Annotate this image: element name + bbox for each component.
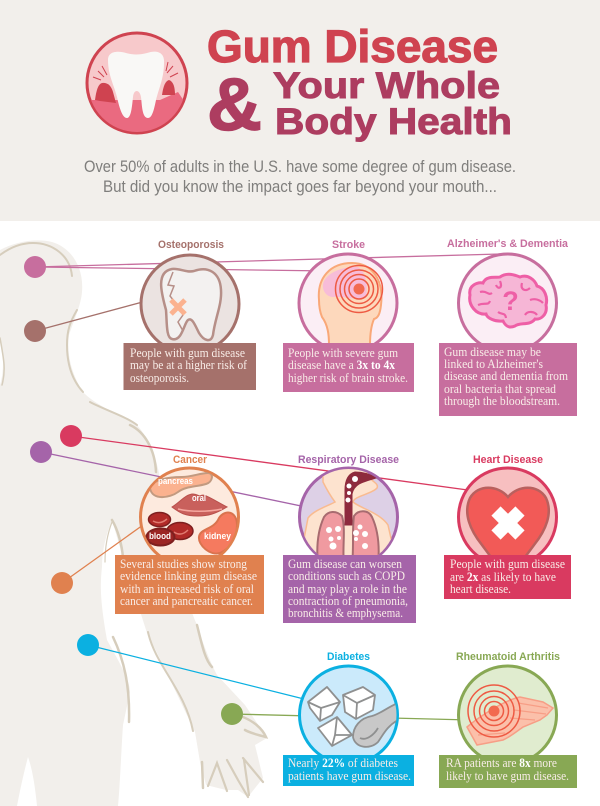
panel: osteoporosis [124, 239, 256, 390]
icon: pancreas, lips, blood, kidney: blood [149, 531, 171, 541]
panel: heart disease: Heart Disease [473, 454, 543, 466]
panel: stroke: Stroke [332, 239, 365, 251]
connector lines [35, 254, 500, 720]
panel: alzheimer's and dementia: linked to Alzheimer's [444, 356, 543, 371]
intro text: Over 50% of adults in the U.S. have some degree of gum disease. [84, 157, 516, 176]
panel: alzheimer's and dementia: Gum disease may be [444, 344, 541, 359]
panel: diabetes [283, 651, 414, 786]
panel: respiratory disease [283, 454, 416, 623]
icon: head with target [299, 254, 397, 352]
panel: respiratory disease: conditions such as COPD [288, 568, 405, 583]
panel: alzheimer's and dementia: through the bloodstream. [444, 393, 560, 408]
icon: pancreas, lips, blood, kidney: pancreas [158, 476, 193, 486]
panel: respiratory disease: contraction of pneumonia, [288, 593, 408, 608]
body marker dots [24, 256, 243, 725]
panel: diabetes: Diabetes [327, 651, 370, 663]
panel: respiratory disease: Gum disease can worsen [288, 556, 402, 571]
panel: respiratory disease: Respiratory Disease [298, 454, 399, 466]
panel: stroke: People with severe gum [288, 345, 398, 360]
title: & [207, 63, 262, 146]
panel: cancer: evidence linking gum disease [120, 568, 257, 583]
icon: pancreas, lips, blood, kidney: kidney [204, 531, 231, 541]
icon: brain with question mark: ? [502, 286, 519, 316]
panel: cancer: with an increased risk of oral [120, 581, 254, 596]
title [207, 21, 512, 146]
panel: diabetes: Nearly 22% of diabetes [288, 755, 398, 770]
intro text: But did you know the impact goes far beyond your mouth... [103, 177, 497, 196]
panel: stroke [283, 239, 414, 392]
panel: stroke: disease have a 3x to 4x [288, 357, 395, 372]
panel: heart disease: heart disease. [450, 581, 511, 596]
panel: osteoporosis: may be at a higher risk of [130, 357, 248, 372]
icon: sugar cubes and spoon [300, 666, 398, 764]
icon: brain with question mark [458, 254, 556, 352]
panel: diabetes: patients have gum disease. [288, 768, 411, 783]
panel: rheumatoid arthritis [439, 651, 577, 788]
panel: alzheimer's and dementia: Alzheimer's & Dementia [447, 238, 569, 250]
icon: pancreas, lips, blood, kidney [140, 468, 238, 566]
panel: alzheimer's and dementia: oral bacteria that spread [444, 381, 556, 396]
panel: rheumatoid arthritis: likely to have gum disease. [446, 768, 569, 783]
icon: hand with target [458, 666, 556, 764]
panel: rheumatoid arthritis: RA patients are 8x more [446, 755, 557, 770]
icon: pancreas, lips, blood, kidney: oral [192, 493, 206, 503]
icon: cracked tooth [141, 255, 239, 353]
panel: cancer: cancer and pancreatic cancer. [120, 593, 253, 608]
panel: cancer: Several studies show strong [120, 556, 247, 571]
panel: heart disease: People with gum disease [450, 556, 565, 571]
panel: stroke: higher risk of brain stroke. [288, 370, 408, 385]
panel: rheumatoid arthritis: Rheumatoid Arthritis [456, 651, 560, 663]
panel: osteoporosis: Osteoporosis [158, 239, 224, 251]
title: Your Whole [273, 65, 500, 106]
panel: alzheimer's and dementia [439, 238, 577, 416]
panel: respiratory disease: bronchitis & emphysema. [288, 605, 403, 620]
panel: respiratory disease: and may play a role in the [288, 581, 407, 596]
panel: cancer: Cancer [173, 454, 208, 466]
panel: cancer [115, 454, 264, 614]
icon: lungs and airway [298, 466, 399, 555]
panel: osteoporosis: People with gum disease [130, 345, 245, 360]
panel: heart disease [444, 454, 571, 599]
panel: heart disease: are 2x as likely to have [450, 569, 556, 584]
header background [0, 0, 600, 221]
panel: osteoporosis: osteoporosis. [130, 370, 189, 385]
icon: heart with cross [457, 466, 558, 555]
panel: alzheimer's and dementia: disease and dementia from [444, 368, 568, 383]
title: Gum Disease [207, 21, 498, 72]
intro text [84, 157, 516, 196]
body silhouette [0, 240, 267, 806]
icon: tooth with receding gums [85, 33, 190, 140]
title: Body Health [275, 101, 512, 142]
